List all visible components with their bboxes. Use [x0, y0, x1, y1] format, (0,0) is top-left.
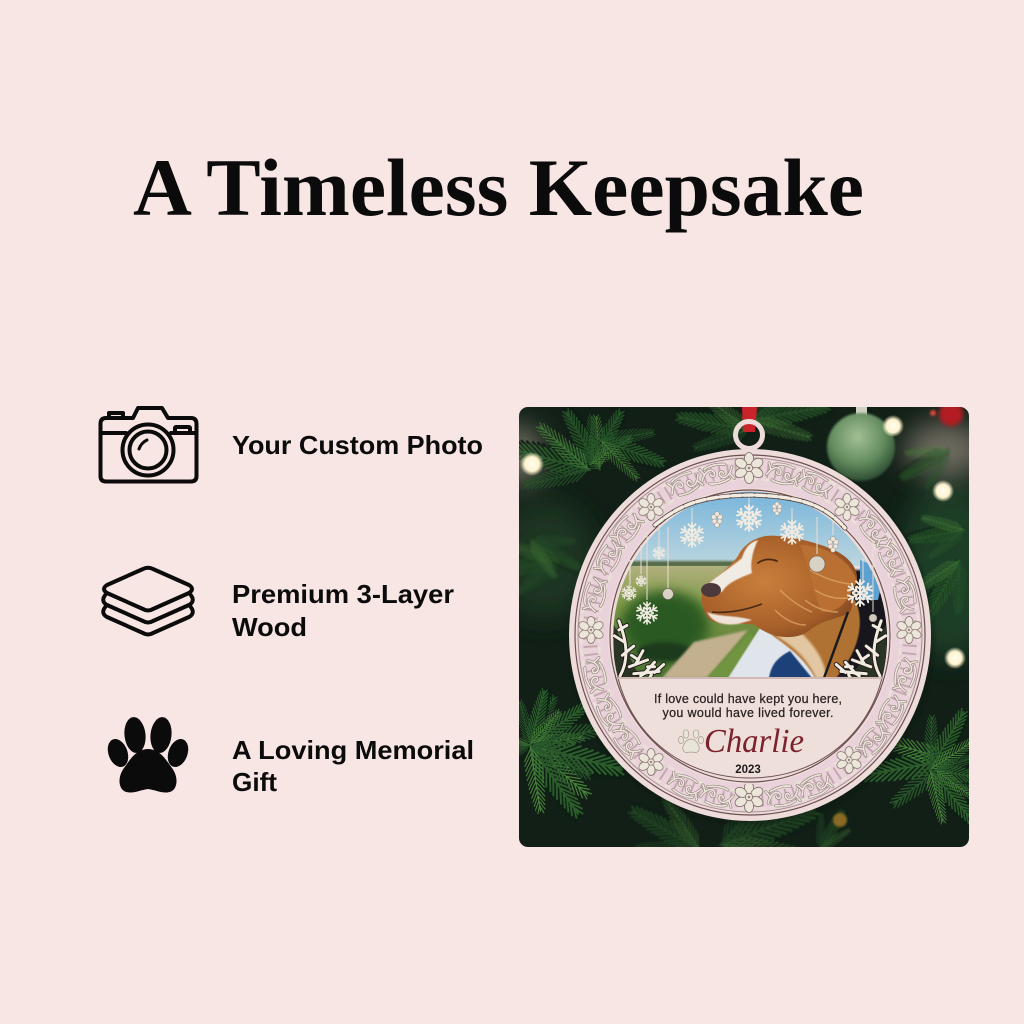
closed eye — [758, 559, 777, 563]
green bauble — [827, 406, 895, 481]
icon: stacked layers — [103, 568, 193, 634]
mouth — [712, 604, 762, 612]
feature list: Gift — [232, 767, 277, 797]
ribbon — [742, 407, 757, 432]
fairy lights — [520, 410, 966, 827]
corner snow foliage — [614, 621, 886, 677]
floral filigree band — [577, 452, 923, 813]
product photo: ornament on a Christmas tree — [519, 407, 969, 847]
sky — [631, 492, 869, 566]
windblown ear — [800, 545, 857, 612]
tree background — [519, 407, 969, 847]
feature text: custom photo: Your Custom Photo — [232, 430, 483, 460]
car door — [728, 628, 815, 678]
dog body — [768, 599, 860, 677]
photo window: dog in a car window — [610, 488, 890, 679]
nose — [701, 583, 721, 597]
small paw — [678, 730, 704, 752]
icon: camera — [100, 408, 196, 482]
name in script: Charlie — [704, 723, 804, 760]
white muzzle blaze — [703, 540, 758, 592]
year: 2023 — [735, 764, 761, 776]
feature text: memorial gift: A Loving Memorial — [232, 735, 474, 765]
inner frame — [608, 488, 892, 784]
tree line — [610, 561, 740, 567]
dark car interior — [815, 570, 890, 678]
feature list — [100, 408, 483, 797]
seat belt strap — [824, 612, 848, 678]
icon: paw print — [104, 716, 192, 793]
red bauble — [939, 402, 963, 426]
ornament — [569, 407, 933, 824]
text panel — [618, 678, 882, 778]
feature list: Wood — [232, 612, 307, 642]
text panel: you would have lived forever. — [662, 706, 834, 720]
dirt road — [662, 630, 748, 678]
hanging loop — [736, 422, 762, 448]
hanging snowflakes and charms — [621, 494, 877, 624]
dark corner shadows — [614, 625, 886, 678]
panel quote: If love could have kept you here, — [654, 692, 842, 706]
feature text: premium wood: Premium 3-Layer — [232, 579, 454, 609]
outer ring — [569, 449, 933, 824]
title: A Timeless Keepsake — [133, 142, 864, 233]
field — [610, 566, 760, 679]
dog head — [702, 536, 857, 637]
